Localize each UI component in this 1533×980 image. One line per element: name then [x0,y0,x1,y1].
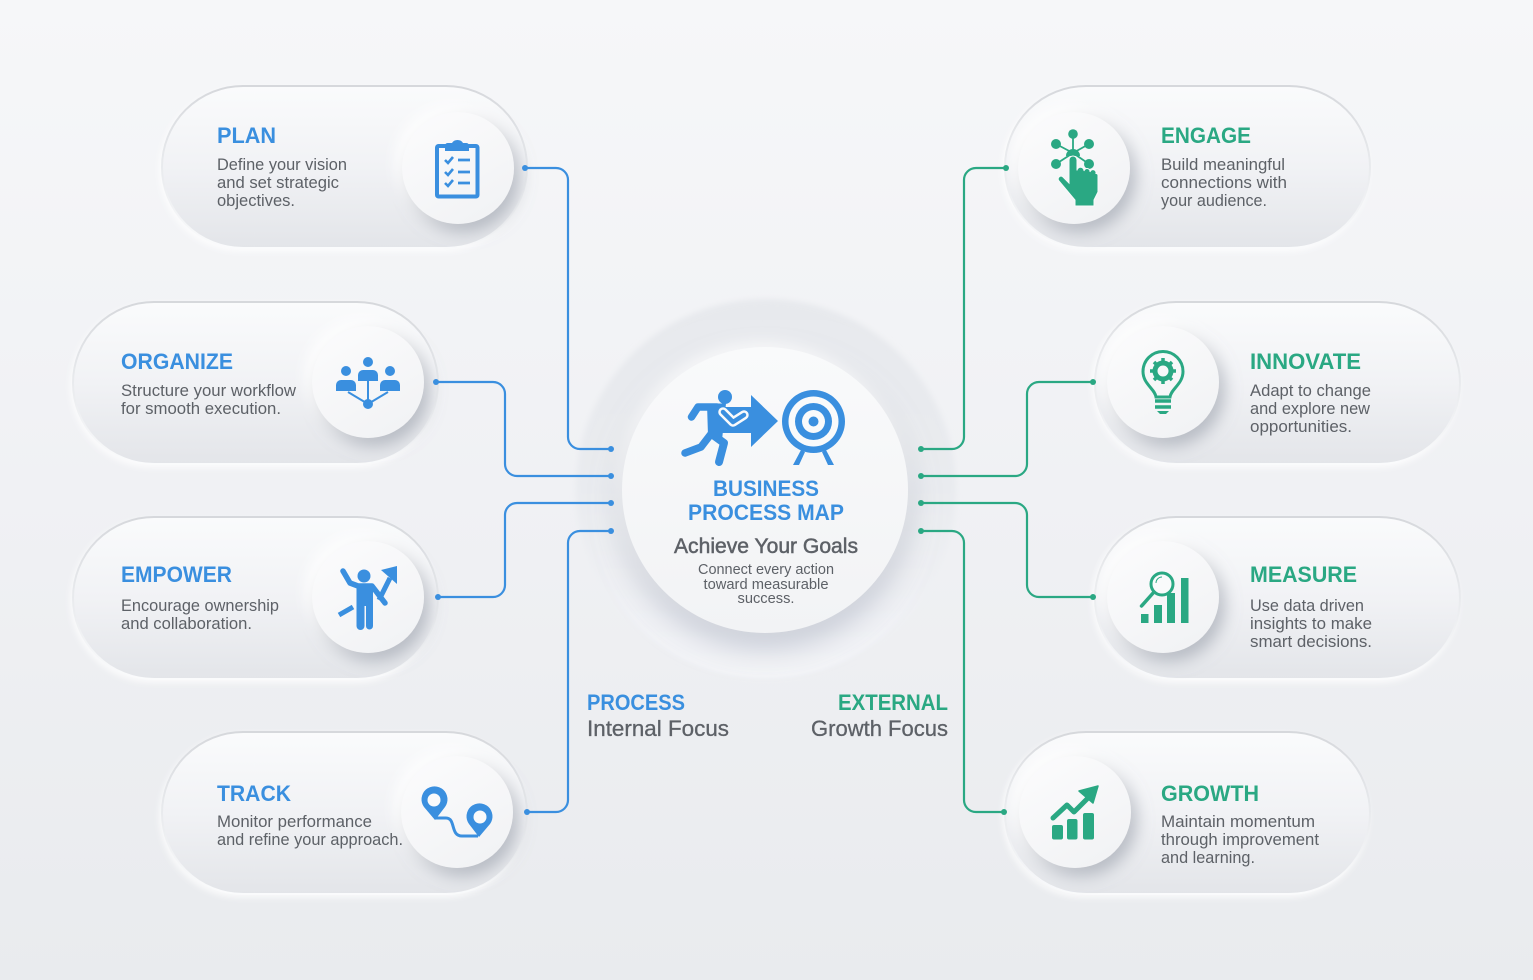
icon: growth chart arrow [1052,786,1098,840]
description [121,382,296,418]
description: Encourage ownership [121,597,279,615]
central hub [576,299,956,679]
description: Monitor performance [217,813,372,831]
description: and set strategic [217,174,339,192]
heading: ENGAGE [1161,123,1251,148]
connector: organize to hub [433,379,614,479]
description: and learning. [1161,849,1255,867]
description [1161,813,1319,867]
heading: PLAN [217,123,276,148]
description: objectives. [217,192,295,210]
panel: track [162,732,527,894]
description: Define your vision [217,156,347,174]
hub title: BUSINESS [713,476,819,501]
panel: innovate [1095,302,1460,464]
connector: growth to hub [918,528,1007,815]
hub description [698,561,834,607]
outer halo ring [576,299,956,679]
description: for smooth execution. [121,400,281,418]
description: insights to make [1250,615,1372,633]
heading: ORGANIZE [121,349,233,374]
description: opportunities. [1250,418,1352,436]
description: Structure your workflow [121,382,296,400]
description: Maintain momentum [1161,813,1315,831]
connector: engage to hub [918,165,1009,452]
icon: bar chart with magnifier [1141,573,1188,623]
description [121,597,279,633]
description [217,813,403,849]
icon: hand touching network [1051,129,1098,206]
description: and collaboration. [121,615,252,633]
description [1250,382,1371,436]
connector: empower to hub [435,500,614,600]
label: external growth focus: Growth Focus [811,716,948,741]
label: external growth focus [811,690,948,741]
connector: innovate to hub [918,379,1096,479]
description: connections with [1161,174,1287,192]
panel: engage [1005,86,1370,248]
icon: light bulb with gear [1143,352,1183,414]
icon: route with map pins [422,786,492,837]
connector: plan to hub [522,165,614,452]
description: your audience. [1161,192,1267,210]
label: process internal focus [587,690,729,741]
icon: team network [336,357,400,409]
label: process internal focus: Internal Focus [587,716,729,741]
label: process internal focus: PROCESS [587,690,685,715]
panel: empower [73,517,438,679]
heading: EMPOWER [121,562,232,587]
description: and refine your approach. [217,831,403,849]
panel: organize [73,302,438,464]
central disc [622,347,908,633]
hub description: success. [738,590,794,607]
description: smart decisions. [1250,633,1372,651]
description: Build meaningful [1161,156,1285,174]
icon: person with rising arrow [339,566,397,630]
panel: growth [1005,732,1370,894]
description: Adapt to change [1250,382,1371,400]
icon: runner with arrow and target [685,390,845,465]
label: external growth focus: EXTERNAL [838,690,948,715]
description [217,156,347,210]
description: Use data driven [1250,597,1364,615]
description [1250,597,1372,651]
connector: measure to hub [918,500,1096,600]
connector: track to hub [524,528,614,815]
hub subtitle: Achieve Your Goals [674,535,858,558]
heading: MEASURE [1250,562,1357,587]
hub description: Connect every action [698,561,834,578]
heading: INNOVATE [1250,349,1361,374]
description: and explore new [1250,400,1370,418]
icon: clipboard checklist [437,140,478,196]
hub description: toward measurable [704,576,828,593]
central hub: PROCESS MAP [688,500,844,525]
heading: GROWTH [1161,781,1259,806]
description: through improvement [1161,831,1319,849]
description [1161,156,1287,210]
heading: TRACK [217,781,292,806]
panel: measure [1095,517,1460,679]
panel: plan [162,86,527,248]
